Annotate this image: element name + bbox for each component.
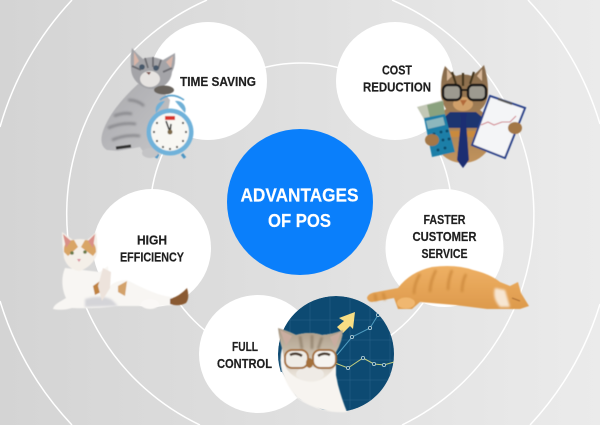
center circle: advantages of POS: ADVANTAGES (240, 186, 358, 206)
chart circle with rising lines and arrow (278, 296, 394, 412)
faster customer service label: FASTER (424, 212, 466, 227)
icon: business cat with calculator and clipboard (417, 65, 525, 168)
panel: cost reduction (336, 22, 454, 140)
cost reduction label: COST (382, 62, 412, 78)
panel: high efficiency (93, 189, 211, 307)
high efficiency label: HIGH (137, 232, 167, 248)
panel: cost reduction: REDUCTION (363, 80, 431, 94)
time saving circle (149, 22, 267, 140)
panel: faster customer service: CUSTOMER (412, 229, 477, 244)
full control label: FULL (232, 339, 258, 354)
icon: white and ginger cat lying down (53, 232, 188, 310)
icon: kitten with alarm clock (101, 48, 194, 158)
center circle: advantages of POS (227, 129, 373, 275)
faster customer service circle (386, 189, 504, 307)
panel: full control: CONTROL (217, 356, 272, 371)
panel: faster customer service: SERVICE (422, 246, 468, 261)
icon: sleeping orange cat (367, 266, 529, 309)
cost reduction circle (336, 22, 454, 140)
high efficiency circle (93, 189, 211, 307)
icon: white cat with round glasses (278, 328, 347, 412)
panel: high efficiency: EFFICIENCY (120, 250, 184, 264)
panel: time saving (149, 22, 267, 140)
panel: faster customer service (386, 189, 504, 307)
full control circle (199, 295, 317, 413)
time saving label: TIME SAVING (180, 74, 256, 89)
center circle: advantages of POS: OF POS (268, 211, 331, 231)
panel: full control (199, 295, 317, 413)
